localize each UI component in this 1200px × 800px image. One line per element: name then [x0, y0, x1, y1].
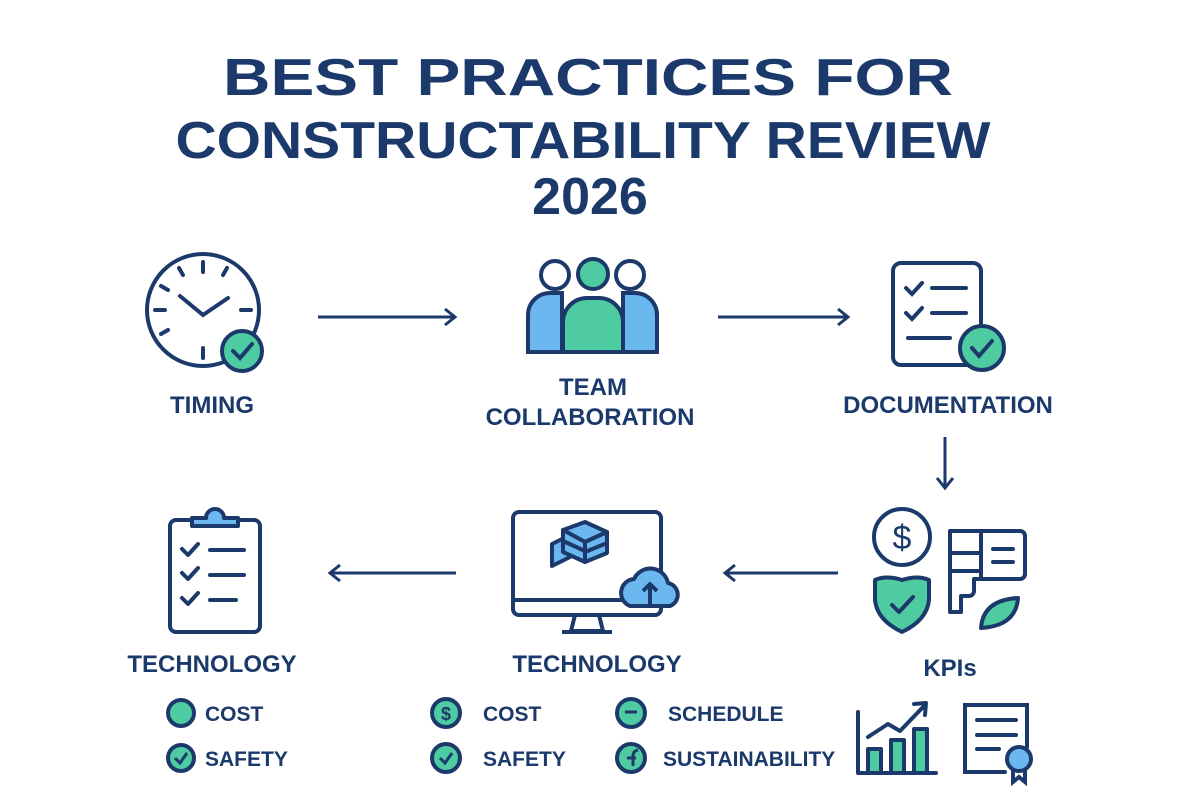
label: KPIs: KPIs — [923, 655, 977, 682]
arrow 2 — [718, 309, 848, 325]
label: team collaboration: TEAM — [559, 374, 627, 401]
icon: KPIs — [874, 509, 1025, 632]
legend: left: SAFETY — [205, 748, 288, 771]
label: technology (middle): TECHNOLOGY — [512, 651, 682, 678]
icon: clipboard — [170, 509, 260, 632]
title — [176, 49, 991, 226]
icon: certificate — [965, 705, 1031, 782]
legend: middle: SUSTAINABILITY — [663, 748, 835, 771]
arrow down — [937, 437, 953, 488]
icon: growth chart — [858, 703, 936, 773]
legend: middle: SAFETY — [483, 748, 566, 771]
legend: left: COST — [205, 703, 264, 726]
icon: team — [528, 259, 657, 352]
icon: computer — [513, 512, 678, 632]
label: team collaboration — [486, 374, 694, 431]
title: CONSTRUCTABILITY REVIEW — [176, 112, 991, 170]
arrow 4 — [725, 565, 838, 581]
icon: clock timing — [147, 254, 262, 371]
legend: middle: COST — [483, 703, 542, 726]
legend: left — [168, 700, 288, 771]
icon: KPIs: $ — [893, 519, 912, 557]
title: 2026 — [532, 168, 648, 226]
label: team collaboration: COLLABORATION — [486, 404, 694, 431]
legend: middle: SCHEDULE — [668, 703, 784, 726]
icon: documentation — [893, 263, 1004, 370]
arrow 5 — [330, 565, 456, 581]
label: documentation: DOCUMENTATION — [843, 392, 1053, 419]
label: technology (left): TECHNOLOGY — [127, 651, 297, 678]
title: BEST PRACTICES FOR — [223, 49, 953, 107]
legend: middle — [432, 699, 835, 772]
label: timing: TIMING — [170, 392, 254, 419]
arrow 1 — [318, 309, 455, 325]
legend: middle: $ — [441, 704, 451, 724]
